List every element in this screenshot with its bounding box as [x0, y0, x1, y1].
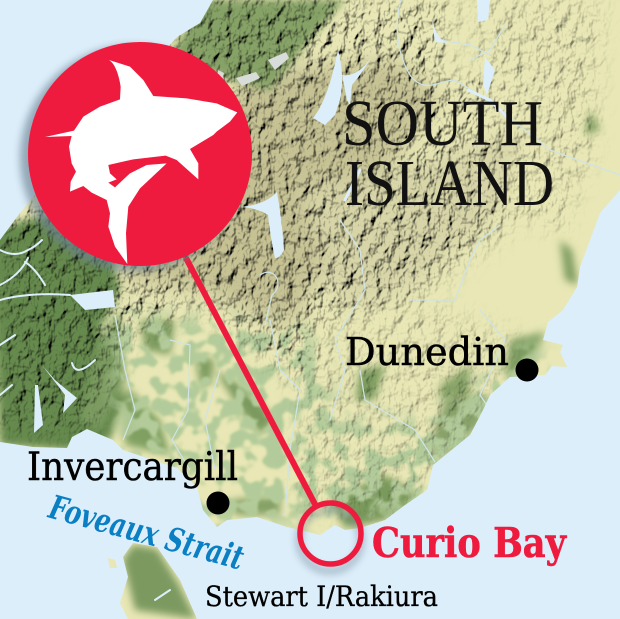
- label: Dunedin: Dunedin: [345, 330, 509, 374]
- label: Invercargill: Invercargill: [27, 445, 238, 490]
- icon: shark badge: [28, 42, 252, 266]
- snow patches: [217, 52, 289, 86]
- label: South Island: SOUTH: [342, 87, 543, 160]
- marker: Dunedin: [516, 358, 538, 382]
- marker: Curio Bay ring: [300, 503, 361, 564]
- scattered vegetation patches: [102, 304, 550, 528]
- rivers: [115, 0, 620, 515]
- marker shadows: [20, 45, 361, 571]
- label: South Island: ISLAND: [345, 147, 554, 220]
- marker: Invercargill: [206, 492, 230, 514]
- label: Curio Bay: Curio Bay: [372, 519, 567, 567]
- lakes and fiords: [34, 0, 495, 433]
- label: Foveaux Strait: Foveaux Strait: [44, 487, 248, 577]
- label: South Island: [342, 87, 554, 220]
- locator line: [186, 258, 317, 508]
- label: Stewart Island: Stewart I/Rakiura: [205, 580, 438, 613]
- icon: shark silhouette: [45, 60, 237, 264]
